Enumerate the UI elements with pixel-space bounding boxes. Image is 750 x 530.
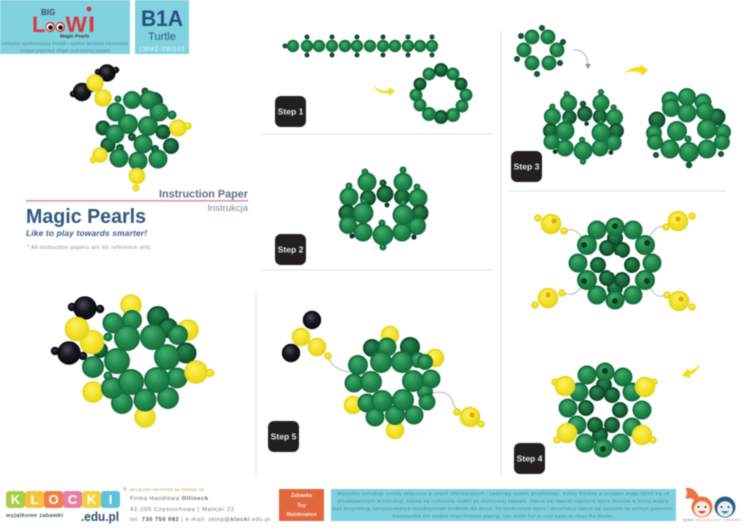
heading: instruction paper: [26, 188, 249, 214]
footer: maintenance label: [279, 489, 324, 521]
title: Magic Pearls: Like to play towards smarter!: [26, 228, 147, 238]
title: Magic Pearls: [26, 206, 152, 251]
heading: instruction paper: Instruction Paper: [159, 188, 249, 200]
heading: instruction paper: Instrukcja: [207, 203, 249, 214]
logo: Big Loowi: I: [88, 12, 95, 37]
panel: step 4: [514, 212, 700, 474]
footer: klocki logo: [5, 486, 127, 524]
divider: after step 2: [262, 269, 493, 271]
footer: maintenance label: Maintenance: [286, 512, 317, 518]
arrow: yellow: [373, 85, 395, 96]
yellow bead with wire: [433, 392, 484, 427]
bead ring: [410, 64, 472, 123]
logo: Big Loowi: L: [32, 12, 45, 37]
footer: company contact: 42-200 Częstochowa | Matejki 22: [130, 507, 234, 513]
panel: step 1: [275, 36, 472, 127]
bead cup model: [544, 90, 623, 164]
divider: after step 1: [262, 133, 493, 135]
divider: vertical left: [255, 292, 257, 476]
footer: klocki logo: I: [109, 492, 112, 507]
brand tagline: Unikalny opatentowany kształt i system łączenia elementów: [2, 41, 129, 46]
badge: Step 2: [275, 234, 306, 265]
footer: klocki logo: C: [68, 492, 78, 507]
panel: brand header: Unique patented shape and joining system: [20, 48, 110, 53]
panel: step 2: [275, 168, 428, 265]
arrow: yellow: [682, 363, 700, 378]
title: Magic Pearls: * All instruction papers are for reference only.: [27, 245, 152, 251]
footer: care instructions: oraz dezynfekcję zarejestrowanym nietoksycznym środkiem dla dzieci. Po skończonym myciu i dezynfekcji zaleca się suszenie na wolnym powietrzu.: [332, 506, 674, 511]
footer: company contact: [130, 488, 270, 523]
badge: Step 3: Step 3: [514, 162, 540, 172]
title: Magic Pearls: Magic Pearls: [26, 206, 146, 228]
bead ring model with yellow beads (lower): [552, 364, 657, 456]
logo: Big Loowi: O: [55, 20, 66, 36]
badge: Step 1: [275, 96, 306, 127]
illustration: finished turtle (top): [70, 65, 191, 191]
footer: company contact: Firma Handlowa Ollineck: [130, 496, 209, 502]
connector wires: [562, 227, 667, 296]
footer: care instructions: Disassemble the models when finished playing. Use either hot or cool water to clean the blocks.: [392, 514, 614, 518]
footer: klocki logo: ®: [123, 486, 127, 493]
bead dome model: [647, 89, 730, 167]
logo: Big Loowi: BIG: [41, 8, 55, 17]
footer: maintenance label: Toy: [297, 503, 306, 509]
bead shell model: [344, 326, 444, 438]
yellow beads with nubs (upper): [532, 212, 695, 310]
bead ring model (upper): [570, 218, 660, 308]
panel: model code: [135, 0, 189, 54]
bead chain: [284, 36, 437, 56]
footer: klocki logo: K: [11, 492, 21, 507]
footer: care instructions: Wszystkie instrukcje zostały dołączone w celach informacyjnych i zawierają modele przykładowe. Kolory klocków w zestawie mogą różnić się od: [337, 491, 670, 496]
logo: Big Loowi: O: [45, 20, 56, 36]
footer: klocki logo: L: [31, 492, 39, 507]
footer: safe toys logo with two kids: tylko bezpieczne zabawki: [683, 517, 741, 522]
logo: Big Loowi: Magic Pearls: [60, 34, 90, 40]
logo: Big Loowi: [32, 6, 95, 40]
arrow: grey curved: [573, 50, 591, 69]
arrow: yellow: [624, 64, 648, 76]
badge: Step 3: [511, 151, 542, 182]
footer: care instructions: przedstawionych w instrukcji. Zaleca się rozłożenie modeli po skończonej zabawie. Zaleca się również regularne mycie klocków w letniej wodzie: [338, 498, 669, 504]
panel: model code: B1A: [141, 6, 183, 31]
footer: company contact: tel. 730 750 082 | e-mail: sklep@klocki.edu.pl: [130, 517, 270, 523]
divider: after step 3: [508, 190, 726, 192]
footer: klocki logo: K: [87, 492, 97, 507]
divider: vertical right: [500, 30, 502, 476]
panel: step 5: [268, 312, 484, 452]
panel: step 3: [511, 26, 730, 182]
badge: Step 4: [514, 443, 545, 474]
footer: klocki logo: wyjątkowe zabawki: [5, 513, 63, 519]
logo: Big Loowi: W: [66, 12, 87, 37]
badge: Step 5: Step 5: [271, 432, 297, 442]
footer: maintenance label: Zabawka: [291, 493, 312, 499]
badge: Step 5: [268, 421, 299, 452]
badge: Step 1: Step 1: [278, 106, 304, 116]
hexagon bead unit: [515, 26, 565, 76]
panel: model code: LWMZ-XWG33: [140, 47, 185, 53]
footer: klocki logo: .edu.pl: [81, 509, 119, 524]
bead cup model: [340, 168, 428, 250]
illustration: finished turtle (large): [52, 295, 214, 427]
footer: care instructions: [331, 489, 676, 521]
panel: brand header: [0, 0, 130, 54]
footer: company contact: WYŁĄCZNY IMPORTER NA TERENIE UE: [130, 488, 205, 492]
panel: model code: Turtle: [148, 31, 176, 43]
badge: Step 4: Step 4: [517, 454, 543, 464]
footer: safe toys logo with two kids: [683, 488, 741, 522]
head beads and wire: [282, 312, 352, 372]
footer: klocki logo: O: [48, 492, 59, 507]
badge: Step 2: Step 2: [278, 244, 304, 254]
